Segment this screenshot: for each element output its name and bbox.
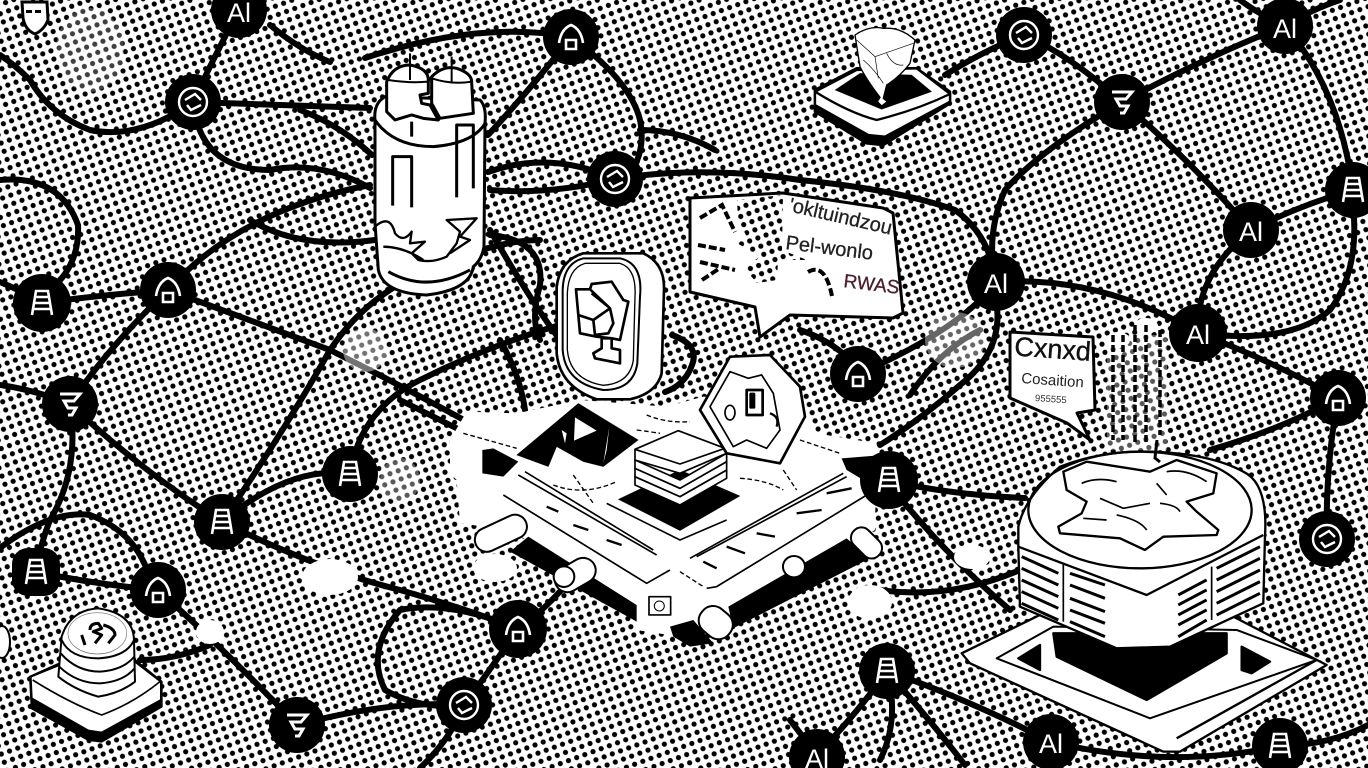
node xyxy=(789,729,845,768)
rising columns xyxy=(1106,318,1167,450)
node: Al xyxy=(984,269,1008,299)
node xyxy=(489,600,547,658)
crystal cube xyxy=(855,27,915,106)
node xyxy=(322,446,378,502)
cylinder body xyxy=(1018,452,1265,648)
speech bubble: coalition xyxy=(1010,332,1095,440)
node xyxy=(130,562,186,618)
badge capsule xyxy=(557,253,664,399)
bubble line 2: Pel-wonlo xyxy=(784,232,874,265)
white cloud patches xyxy=(56,8,990,644)
node xyxy=(543,9,599,65)
black pyramid xyxy=(517,403,638,467)
vent stripes xyxy=(1022,547,1260,637)
node: Al xyxy=(1039,729,1063,759)
bubble line 3: RWAS xyxy=(842,271,900,299)
bubble halftone band xyxy=(737,195,807,283)
node xyxy=(967,253,1025,311)
node xyxy=(996,7,1052,63)
node xyxy=(13,274,71,332)
node xyxy=(1310,370,1366,426)
bubble line 1: 'okltuindzou xyxy=(787,194,894,239)
bubble scribbles xyxy=(698,205,832,296)
node xyxy=(211,0,267,38)
node: Al xyxy=(1186,320,1210,350)
node xyxy=(42,376,98,432)
central platform xyxy=(450,397,900,647)
node xyxy=(859,643,915,699)
node xyxy=(269,697,325,753)
surface scribbles xyxy=(463,415,840,587)
platform surface xyxy=(450,397,877,637)
node xyxy=(1257,0,1313,54)
node xyxy=(1252,718,1308,768)
tab left edge xyxy=(0,626,10,658)
node xyxy=(1325,162,1368,218)
node xyxy=(1023,714,1079,768)
node xyxy=(1094,74,1150,130)
coin stack on tile xyxy=(30,608,162,742)
black wedges xyxy=(482,448,900,647)
speech bubble: real-world RWAs xyxy=(690,193,903,337)
node xyxy=(1299,511,1355,567)
cube on platform xyxy=(815,27,950,145)
node xyxy=(830,346,886,402)
node xyxy=(194,494,250,550)
node under platform edge xyxy=(860,451,918,509)
tray xyxy=(815,68,950,145)
tower: twin cylinder tank xyxy=(375,53,485,295)
server stack with map xyxy=(962,452,1327,752)
node xyxy=(140,262,196,318)
bubble text: 955555 xyxy=(1035,393,1067,406)
node xyxy=(12,548,60,596)
node xyxy=(1223,202,1279,258)
dash marks xyxy=(547,488,852,568)
polygon crystal xyxy=(700,355,805,463)
node: Al xyxy=(1239,217,1263,247)
icon: square tile xyxy=(649,597,671,615)
tile xyxy=(30,660,162,742)
coins xyxy=(58,608,135,697)
map top xyxy=(1058,460,1218,550)
node xyxy=(587,151,643,207)
black base diamond xyxy=(618,470,740,531)
corner tabs xyxy=(471,511,886,645)
bubble text xyxy=(1011,332,1092,408)
node xyxy=(1169,304,1227,362)
icon: shield top left xyxy=(22,2,48,34)
layered stack xyxy=(635,431,727,505)
node xyxy=(165,74,221,130)
node xyxy=(436,677,492,733)
node: Al xyxy=(1273,14,1297,44)
bubble text: Cosaition xyxy=(1021,370,1084,391)
platform edges xyxy=(503,472,875,588)
bubble text: Cxnxd xyxy=(1014,332,1092,367)
base plate xyxy=(962,610,1327,752)
server top xyxy=(1155,440,1160,462)
